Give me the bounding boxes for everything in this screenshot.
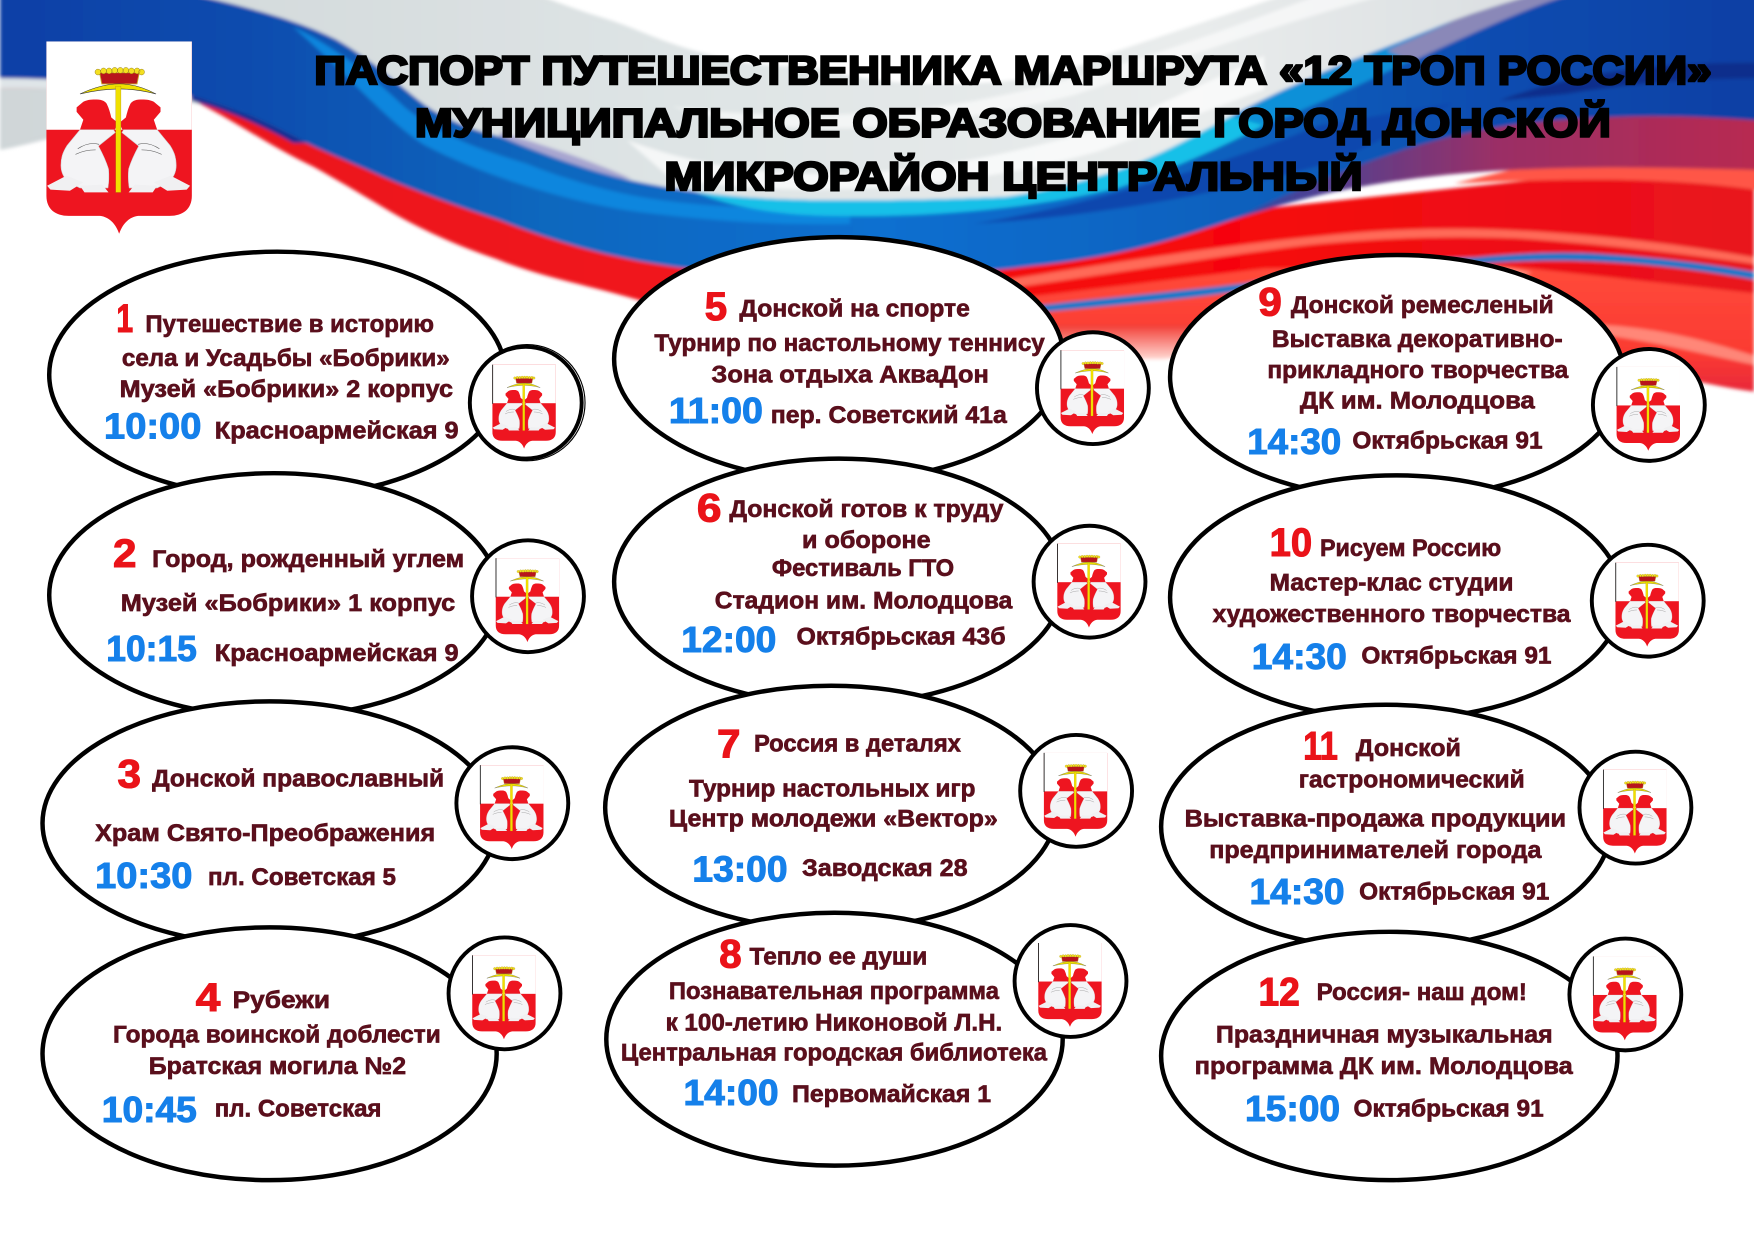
panel: stop 6 [614, 459, 1145, 705]
number 6: 6 [697, 485, 722, 530]
text: stop 6 description: Стадион им. Молодцова [715, 588, 1013, 615]
text: stop 12 description: программа ДК им. Молодцова [1195, 1053, 1573, 1080]
icon: emblem badge 5 [1037, 332, 1149, 444]
text: stop 8 description: Тепло ее души [749, 943, 927, 970]
text: stop 7 description [669, 731, 998, 833]
address: Красноармейская 9 [215, 640, 459, 667]
address: пл. Советская 5 [208, 864, 396, 891]
number 12: 12 [1258, 970, 1300, 1015]
text: stop 4 description: Города воинской доблести [113, 1022, 441, 1049]
panel: stop 1 [49, 252, 585, 498]
text: stop 2 description: Город, рожденный углем [152, 546, 464, 573]
number 8: 8 [719, 932, 742, 977]
text: stop 4 description: Братская могила №2 [149, 1053, 406, 1080]
text: stop 5 description: Зона отдыха АкваДон [711, 362, 989, 389]
time 11:00: 11:00 [669, 391, 763, 431]
text: stop 9 description: Донской ремесленый [1291, 292, 1554, 319]
text: stop 3 description: Донской православный [152, 765, 444, 792]
icon: emblem badge 10 [1592, 545, 1704, 657]
municipal coat of arms [46, 41, 192, 234]
time 14:30: 14:30 [1247, 422, 1341, 462]
icon: emblem badge 3 [456, 747, 568, 859]
number 5: 5 [705, 284, 727, 329]
text: stop 5 description: Донской на спорте [739, 296, 970, 323]
title [314, 48, 1711, 199]
icon: emblem badge 1 [469, 345, 585, 461]
text: stop 8 description [621, 943, 1048, 1066]
time 14:30: 14:30 [1252, 637, 1347, 677]
icon: emblem badge 9 [1593, 349, 1705, 461]
address: Октябрьская 91 [1354, 1095, 1544, 1122]
icon: emblem badge 12 [1569, 939, 1681, 1050]
text: stop 6 description [715, 496, 1013, 615]
time 10:15: 10:15 [106, 629, 197, 669]
text: stop 10 description: Рисуем Россию [1320, 535, 1501, 562]
title: МИКРОРАЙОН ЦЕНТРАЛЬНЫЙ [664, 153, 1362, 199]
text: stop 8 description: Центральная городская библиотека [621, 1039, 1048, 1066]
panel: stop 5 [614, 237, 1149, 481]
time 15:00: 15:00 [1245, 1089, 1340, 1129]
text: stop 4 description [113, 987, 441, 1080]
text: stop 7 description: Центр молодежи «Вектор» [669, 806, 998, 833]
text: stop 5 description [654, 296, 1045, 389]
number 3: 3 [117, 752, 141, 797]
address: Заводская 28 [802, 855, 968, 882]
text: stop 2 description [121, 546, 464, 617]
text: stop 1 description [120, 311, 453, 403]
number 1: 1 [116, 296, 133, 341]
text: stop 12 description: Россия- наш дом! [1317, 979, 1527, 1006]
icon: emblem badge 4 [449, 937, 560, 1049]
number 4: 4 [196, 975, 221, 1020]
panel: stop 12 [1161, 932, 1681, 1180]
text: stop 9 description: прикладного творчества [1267, 357, 1569, 384]
title: ПАСПОРТ ПУТЕШЕСТВЕННИКА МАРШРУТА «12 ТРОП РОССИИ» [314, 48, 1711, 93]
panel: stop 8 [606, 913, 1126, 1166]
text: stop 4 description: Рубежи [233, 987, 330, 1014]
time 12:00: 12:00 [681, 620, 776, 660]
text: stop 6 description: и обороне [802, 527, 931, 554]
text: stop 11 description: Выставка-продажа продукции [1185, 806, 1566, 833]
text: stop 8 description: Познавательная программа [669, 978, 1000, 1005]
text: stop 1 description: Музей «Бобрики» 2 корпус [120, 376, 453, 403]
time 14:30: 14:30 [1250, 872, 1345, 912]
title: МУНИЦИПАЛЬНОЕ ОБРАЗОВАНИЕ ГОРОД ДОНСКОЙ [415, 99, 1611, 145]
text: stop 12 description: Праздничная музыкальная [1216, 1022, 1553, 1049]
icon: emblem badge 7 [1020, 735, 1132, 847]
icon: emblem badge 8 [1015, 925, 1126, 1037]
text: stop 10 description: художественного творчества [1213, 601, 1571, 628]
icon: emblem badge 11 [1579, 752, 1691, 864]
text: stop 9 description: ДК им. Молодцова [1300, 387, 1535, 414]
address: Первомайская 1 [792, 1081, 991, 1108]
time 10:45: 10:45 [102, 1090, 197, 1130]
time 10:00: 10:00 [104, 407, 201, 447]
text: stop 3 description: Храм Свято-Преображения [95, 820, 435, 847]
text: stop 2 description: Музей «Бобрики» 1 корпус [121, 590, 455, 617]
panel: stop 3 [43, 701, 568, 945]
address: пл. Советская [215, 1095, 381, 1122]
panel: stop 11 [1161, 705, 1691, 949]
text: stop 1 description: Путешествие в историю [145, 311, 434, 338]
text: stop 7 description: Турнир настольных игр [689, 775, 975, 802]
panel: stop 7 [605, 686, 1132, 930]
text: stop 11 description: Донской [1356, 735, 1461, 762]
panel: stop 10 [1170, 475, 1704, 719]
address: Октябрьская 43б [796, 623, 1006, 650]
address: Красноармейская 9 [215, 418, 459, 445]
text: stop 11 description: гастрономический [1299, 767, 1525, 794]
address: Октябрьская 91 [1352, 428, 1543, 455]
background: flag waves [0, 0, 1754, 392]
text: stop 10 description [1213, 535, 1571, 628]
time 13:00: 13:00 [692, 849, 788, 889]
icon: emblem badge 2 [472, 540, 584, 652]
number 11: 11 [1303, 724, 1338, 769]
number 2: 2 [113, 531, 136, 576]
panel: stop 2 [49, 473, 584, 717]
text: stop 6 description: Фестиваль ГТО [772, 555, 954, 582]
text: stop 12 description [1195, 979, 1573, 1080]
number 9: 9 [1258, 279, 1282, 324]
text: stop 9 description: Выставка декоративно- [1272, 326, 1563, 353]
text: stop 8 description: к 100-летию Никоновой Л.Н. [666, 1009, 1002, 1036]
icon: emblem badge 6 [1034, 526, 1145, 638]
text: stop 11 description [1185, 735, 1566, 864]
text: stop 10 description: Мастер-клас студии [1270, 570, 1513, 597]
text: stop 3 description [95, 765, 444, 847]
text: stop 6 description: Донской готов к труду [729, 496, 1004, 523]
address: Октябрьская 91 [1361, 642, 1552, 669]
text: stop 7 description: Россия в деталях [754, 731, 962, 758]
time 10:30: 10:30 [95, 856, 192, 896]
panel: stop 4 [43, 927, 560, 1180]
address: Октябрьская 91 [1359, 878, 1549, 905]
text: stop 1 description: села и Усадьбы «Бобрики» [122, 345, 450, 372]
text: stop 9 description [1267, 292, 1569, 414]
address: пер. Советский 41а [771, 402, 1007, 429]
text: stop 5 description: Турнир по настольному теннису [654, 330, 1045, 357]
number 7: 7 [717, 721, 741, 766]
time 14:00: 14:00 [683, 1073, 779, 1113]
text: stop 11 description: предпринимателей города [1209, 837, 1542, 864]
number 10: 10 [1270, 520, 1312, 565]
panel: stop 9 [1170, 255, 1705, 499]
